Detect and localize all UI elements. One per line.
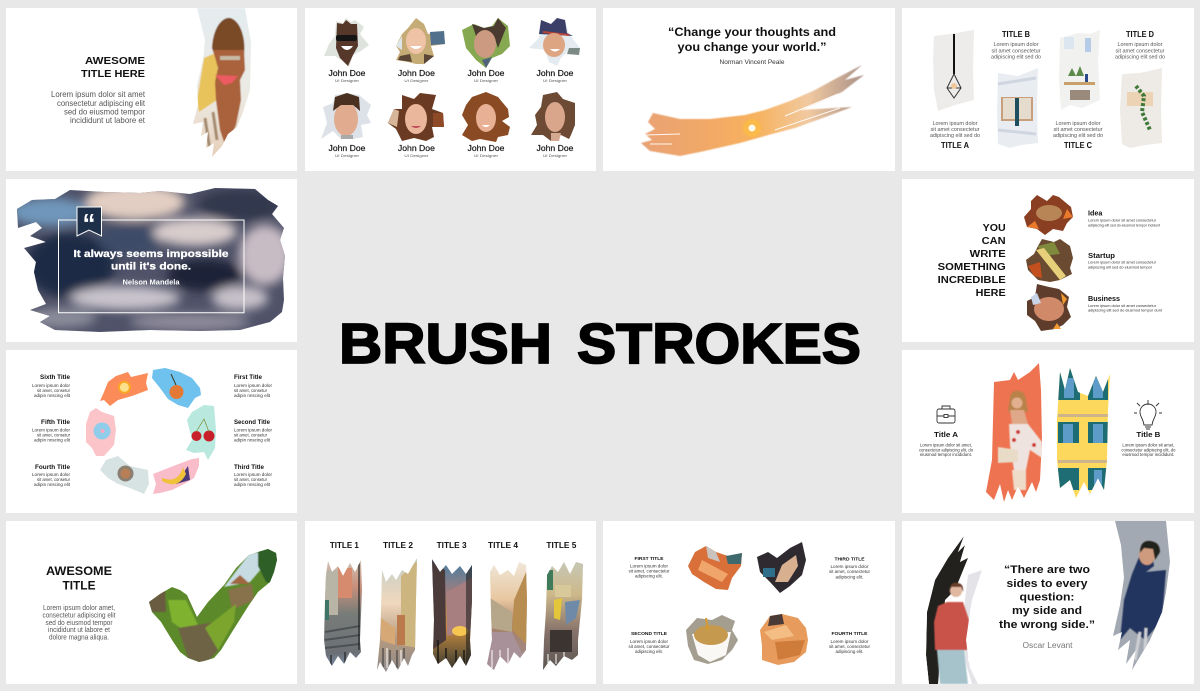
column B text (991, 30, 1041, 60)
left labels: sit amet, consetur (37, 388, 71, 393)
panel: two photo strokes (902, 350, 1194, 513)
right labels: adipin nnscing elit (234, 482, 271, 487)
text block: lorem: sed do eiusmod tempor (64, 106, 145, 116)
item: idea: adipiscing elit sed do eiusmod tempor incidunt (1088, 224, 1161, 228)
name 7: UI Designer (474, 153, 499, 158)
text: title B: Title B (1136, 430, 1161, 439)
column D text: sit amet consectetur (1116, 48, 1165, 54)
brush: mint with cherries (186, 405, 216, 460)
heading: YOU (983, 222, 1006, 234)
name 5: UI Designer (335, 153, 360, 158)
brush: pink with banana (153, 458, 199, 494)
strip 4: curved lane (487, 562, 527, 670)
name 2 (398, 69, 435, 83)
text block: lorem: consectetur adipiscing elit (57, 98, 146, 108)
image: grilled food 3 (1027, 284, 1071, 331)
column D text: adipiscing elit sed do (1115, 54, 1165, 60)
strip 5: laundry street (543, 562, 583, 670)
quote: sides to every (1006, 578, 1088, 590)
portrait 1 (324, 18, 369, 67)
image: surfer in brush stroke (193, 8, 251, 157)
label: first title (628, 556, 670, 578)
name 4: John Doe (536, 69, 574, 78)
column A text: Lorem ipsum dolor (932, 121, 978, 127)
label: third title (829, 556, 871, 580)
strip titles: TITLE 3 (437, 541, 467, 550)
panel: surfer slide (6, 8, 297, 171)
text: title B: Lorem ipsum dolor sit amet, (1122, 442, 1174, 448)
label: fourth title (829, 631, 871, 654)
quote: you change your world.” (678, 40, 826, 54)
heading: SOMETHING (938, 261, 1006, 273)
item: idea (1088, 208, 1161, 228)
left labels: Lorem ipsum dolor (32, 428, 71, 432)
column D text: TITLE D (1126, 30, 1154, 39)
image: heart food (757, 542, 806, 593)
left labels: adipin nnscing elit (34, 482, 71, 487)
label: third title: sit amet, consectetur (829, 569, 871, 574)
brush: light pink with plate (86, 408, 116, 456)
icon: quote ribbon: “ (82, 208, 96, 238)
name 6: John Doe (398, 144, 435, 153)
strip titles: TITLE 2 (383, 541, 414, 550)
name 1 (328, 69, 366, 83)
portrait 5 (321, 93, 371, 139)
left labels: sit amet, consetur (37, 477, 71, 482)
panel: food steps (902, 179, 1194, 342)
name 8: UI Designer (543, 153, 568, 158)
portrait 2 (396, 18, 445, 64)
item: idea: Lorem ipsum dolor sit amet consectetur (1088, 218, 1157, 222)
strip titles: TITLE 4 (488, 541, 519, 550)
attribution: Oscar Levant (1022, 641, 1073, 650)
text block: incididunt ut labore et (48, 627, 110, 634)
panel: team faces (305, 8, 596, 171)
name 7 (468, 144, 505, 158)
name 3 (468, 69, 505, 83)
text block: Lorem ipsum dolor amet, (43, 605, 115, 612)
panel: food grid (603, 521, 895, 684)
left labels: adipin nnscing elit (34, 393, 71, 398)
label: third title: THIRD TITLE (834, 556, 865, 562)
attribution: Nelson Mandela (122, 280, 180, 286)
quote (668, 25, 836, 54)
label: first title: FIRST TITLE (634, 556, 664, 562)
label: fourth title: sit amet, consectetur (829, 644, 871, 649)
item: startup (1088, 251, 1157, 270)
text: title A: eiusmod tempor incididunt. (920, 452, 972, 457)
panel: five street strips (305, 521, 596, 684)
column D text (1115, 30, 1165, 60)
image: lamp on brush (933, 30, 974, 111)
column B text: TITLE B (1002, 30, 1030, 39)
item: startup: Startup (1088, 251, 1116, 260)
title: BRUSH (339, 312, 552, 376)
text block: lorem: incididunt ut labore et (70, 115, 146, 125)
right labels: sit amet, consetur (234, 388, 268, 393)
text block: dolore magna aliqua. (49, 634, 109, 642)
left labels: Lorem ipsum dolor (32, 472, 71, 477)
image: croissants (760, 614, 808, 665)
portrait 6 (388, 93, 444, 141)
label: second title: adipiscing elit. (635, 649, 663, 654)
right labels: Second Title (234, 419, 270, 426)
column C text (1053, 121, 1103, 150)
left labels: sit amet, consetur (37, 432, 71, 438)
text block: sed do eiusmod tempor (46, 620, 113, 627)
right labels: Third Title (234, 464, 264, 471)
name 6: UI Designer (404, 153, 429, 158)
heading (46, 566, 112, 592)
panel: two sides quote (902, 520, 1194, 686)
right labels: sit amet, consetur (234, 477, 268, 482)
label: second title (628, 631, 670, 654)
heading: AWESOME (46, 566, 112, 578)
image: man on brick brush (1113, 521, 1170, 670)
quote text (74, 248, 229, 272)
column B text: Lorem ipsum dolor (994, 42, 1039, 48)
item: idea: Idea (1088, 208, 1103, 218)
image: hanging plant (1120, 68, 1162, 148)
text: title B (1121, 430, 1176, 457)
panel: four titled columns (902, 8, 1194, 171)
name 3: UI Designer (474, 78, 499, 83)
name 1: John Doe (328, 69, 366, 78)
left labels: Lorem ipsum dolor (32, 383, 71, 388)
label: third title: adipiscing elit. (836, 574, 864, 580)
icon: briefcase (937, 406, 955, 423)
image: yellow facade (1057, 368, 1110, 498)
item: business (1088, 294, 1163, 312)
image: grilled food 2 (1026, 239, 1073, 282)
name 1: UI Designer (335, 78, 360, 83)
item: business: Lorem ipsum dolor sit amet consectetur (1088, 304, 1157, 308)
column D text: Lorem ipsum dolor (1118, 42, 1163, 48)
label: first title: adipiscing elit. (635, 574, 663, 578)
name 4 (536, 69, 574, 83)
quote: “There are two (1004, 564, 1090, 576)
left labels: Sixth Title (40, 374, 70, 381)
heading: INCREDIBLE (938, 274, 1006, 286)
heading: CAN (982, 235, 1006, 247)
label: second title: SECOND TITLE (631, 631, 668, 637)
portrait 4 (529, 18, 580, 66)
label: first title: sit amet, consectetur (628, 568, 670, 574)
image: room shelf (1059, 30, 1100, 110)
label: third title: Lorem ipsum dolor (830, 564, 869, 569)
right labels: Lorem ipsum dolor (234, 383, 273, 388)
quote text: It always seems impossible (74, 248, 229, 260)
heading: TITLE (62, 580, 96, 592)
title: STROKES (577, 312, 861, 376)
right labels: First Title (234, 374, 262, 381)
text: title A: consectetur adipiscing elit, do (919, 447, 974, 452)
name 5: John Doe (328, 144, 366, 153)
icon: light bulb (1134, 400, 1162, 429)
name 5 (328, 144, 366, 158)
name 6 (398, 144, 435, 158)
heading: awesome title here: TITLE HERE (81, 68, 145, 80)
column A text: sit amet consectetur (930, 127, 980, 133)
label: fourth title: Lorem ipsum dolor (830, 639, 869, 644)
right labels: Lorem ipsum dolor (234, 428, 273, 432)
right labels: sit amet, consetur (234, 432, 268, 438)
text: title A: Lorem ipsum dolor sit amet, (920, 442, 972, 448)
column A text (930, 121, 980, 150)
text block (42, 605, 116, 642)
column B text: adipiscing elit sed do (991, 54, 1041, 60)
brush: grey with coffee (100, 456, 149, 494)
brush: orange with fruit (100, 372, 148, 406)
text: title A (919, 430, 974, 457)
strip titles: TITLE 5 (546, 541, 577, 550)
right labels: adipin nnscing elit (234, 393, 271, 398)
text block: lorem: Lorem ipsum dolor sit amet (51, 89, 146, 99)
panel: cloud quote (6, 179, 297, 342)
heading (938, 222, 1006, 299)
label: second title: sit amet, consectetur (628, 644, 670, 649)
text: title A: Title A (934, 430, 959, 439)
panel: fruit cycle (6, 350, 297, 513)
text: title B: eiusmod tempor incididunt. (1122, 452, 1174, 457)
quote: question: (1020, 592, 1074, 604)
strip 3: night square (432, 559, 472, 668)
icon: quote ribbon (77, 207, 102, 238)
image: checkmark landscape (149, 549, 277, 662)
column C text: adipiscing elit sed do (1053, 133, 1103, 139)
portrait 3 (462, 18, 510, 68)
label: first title: Lorem ipsum dolor (630, 564, 669, 568)
heading: awesome title here (81, 55, 145, 80)
column A text: adipiscing elit sed do (930, 133, 980, 139)
text block: consectetur adipiscing elit (42, 612, 116, 620)
panel: checkmark (6, 521, 297, 684)
name 7: John Doe (468, 144, 505, 153)
item: startup: adipiscing elit sed do eiusmod tempor (1088, 266, 1153, 270)
brush: blue with tangerine (152, 368, 201, 408)
right labels: adipin nnscing elit (234, 438, 271, 442)
left labels (32, 374, 71, 487)
name 2: John Doe (398, 69, 435, 78)
quote: my side and (1012, 605, 1082, 617)
heading: HERE (976, 287, 1006, 299)
right labels: Lorem ipsum dolor (234, 472, 273, 477)
portrait 8 (531, 92, 575, 141)
name 8 (536, 144, 574, 158)
strip titles (330, 541, 577, 550)
right labels (234, 374, 273, 487)
label: second title: Lorem ipsum dolor (630, 639, 669, 644)
item: business: adipiscing elit sed do eiusmod tempor dunt (1088, 308, 1163, 312)
column A text: TITLE A (941, 141, 969, 150)
quote: “Change your thoughts and (668, 25, 836, 39)
quote: the wrong side.” (999, 619, 1095, 631)
text block: lorem (51, 89, 146, 125)
image: shrimp (688, 546, 742, 590)
image: cup (686, 615, 738, 664)
portrait 7 (462, 92, 510, 142)
name 3: John Doe (468, 69, 505, 78)
title (339, 312, 861, 376)
strip 1: stairs (324, 560, 362, 666)
strip 2: alley at dusk (377, 558, 417, 672)
quote (999, 564, 1095, 631)
quote text: until it's done. (111, 260, 191, 272)
column C text: TITLE C (1064, 141, 1092, 150)
column C text: sit amet consectetur (1054, 127, 1103, 133)
image: woman on orange brush (986, 363, 1042, 502)
image: grilled food 1 (1024, 195, 1073, 235)
attribution: Norman Vincent Peale (720, 60, 785, 66)
image: woman on black brush (924, 534, 984, 686)
item: business: Business (1088, 294, 1120, 303)
label: fourth title: adipiscing elit. (836, 649, 864, 654)
image: sunset brush stroke (641, 65, 864, 156)
label: fourth title: FOURTH TITLE (832, 631, 868, 637)
text: title B: consectetur adipiscing elit, do (1121, 447, 1176, 452)
column B text: sit amet consectetur (992, 48, 1041, 54)
left labels: adipin nnscing elit (34, 438, 71, 442)
left labels: Fourth Title (35, 464, 70, 471)
item: startup: Lorem ipsum dolor sit amet consectetur (1088, 260, 1157, 264)
panel: sunset quote (603, 8, 895, 171)
left labels: Fifth Title (41, 419, 70, 426)
image: clouds in brush (10, 184, 291, 334)
heading: WRITE (970, 248, 1006, 260)
name 2: UI Designer (404, 78, 429, 83)
name 8: John Doe (536, 144, 574, 153)
name 4: UI Designer (543, 78, 568, 83)
frame (58, 220, 244, 313)
strip titles: TITLE 1 (330, 541, 359, 550)
image: book on sheets (997, 68, 1038, 148)
heading: awesome title here: AWESOME (85, 55, 145, 67)
column C text: Lorem ipsum dolor (1056, 121, 1101, 127)
